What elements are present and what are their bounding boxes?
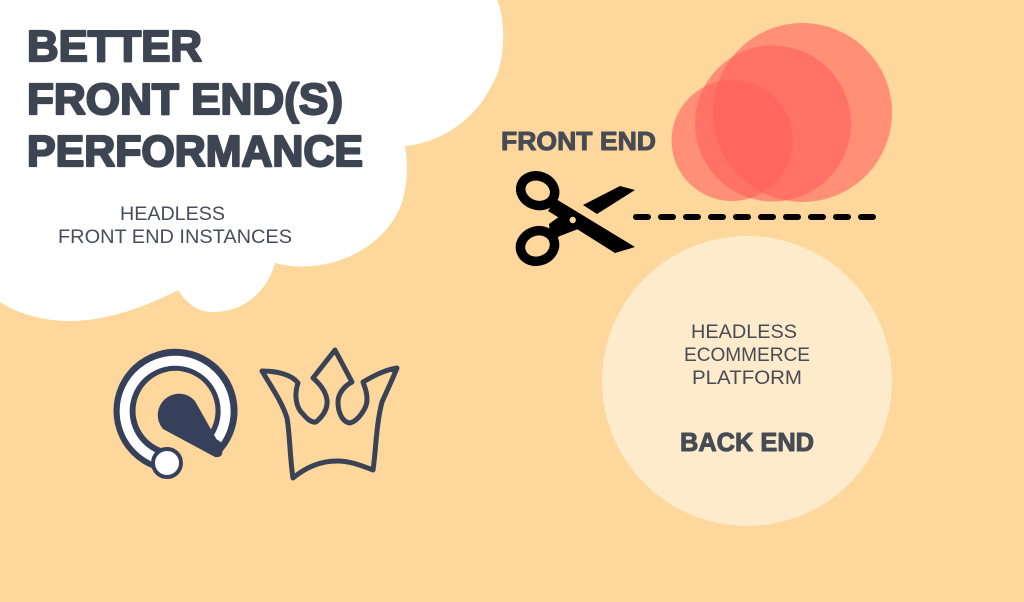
label: back end: BACK END	[680, 427, 814, 457]
title: BETTER	[27, 22, 202, 71]
back end text	[684, 322, 810, 389]
back end text: ECOMMERCE	[684, 345, 810, 366]
icon: scissors	[516, 171, 635, 266]
title: PERFORMANCE	[27, 127, 363, 176]
panel: back end circle	[602, 236, 892, 526]
front end overlapping circles	[672, 23, 892, 202]
back end text: HEADLESS	[691, 322, 797, 343]
subtitle: HEADLESS	[120, 204, 225, 225]
subtitle: FRONT END INSTANCES	[58, 227, 292, 248]
back end text: PLATFORM	[692, 368, 802, 389]
panel: white cloud	[0, 0, 503, 321]
cut line	[636, 214, 873, 220]
label: front end: FRONT END	[501, 126, 656, 156]
title	[27, 22, 363, 176]
subtitle	[58, 204, 292, 248]
icon: crown	[262, 350, 397, 478]
icon: gauge	[125, 360, 227, 477]
title: FRONT END(S)	[27, 75, 343, 124]
